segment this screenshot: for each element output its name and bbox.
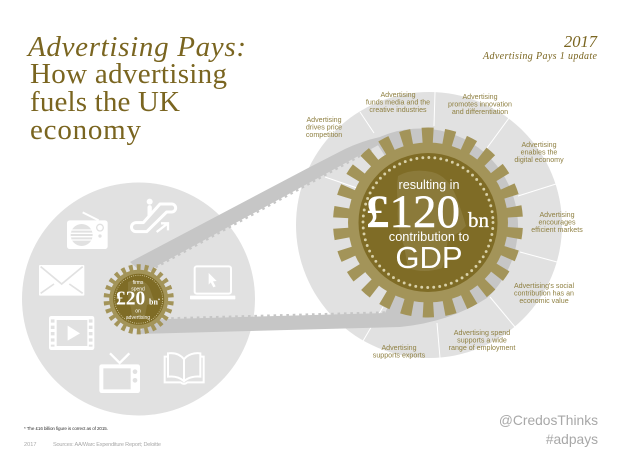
icon: video: [49, 316, 94, 350]
panel: advertising media circle: [22, 182, 255, 416]
label: social contribution: Advertising's social: [514, 282, 574, 290]
text: firms spend £20bn on advertising: *: [158, 298, 161, 302]
icon: open book: [165, 353, 204, 384]
text: firms spend £20bn on advertising: firms: [133, 280, 144, 286]
label: employment: Advertising spend: [454, 329, 510, 337]
belt connecting the gears: [130, 128, 518, 334]
label: exports: supports exports: [373, 352, 426, 360]
text: firms spend £20bn on advertising: on: [135, 308, 141, 314]
label: efficient markets: Advertising: [539, 211, 575, 219]
sources line: Sources: AA/Warc Expenditure Report; Deloitte: [53, 442, 161, 448]
label: innovation: Advertising: [462, 93, 498, 101]
label: price competition: drives price: [306, 124, 342, 132]
text: resulting in £120bn contribution to GDP: resulting in: [399, 178, 459, 192]
queen's head watermark: [397, 171, 466, 271]
text: resulting in £120bn contribution to GDP: bn: [468, 208, 490, 232]
title: fuels the UK: [30, 86, 180, 118]
label: digital economy: digital economy: [514, 156, 564, 164]
text: resulting in £120bn contribution to GDP: contribution to: [389, 229, 469, 244]
icon: television: [99, 353, 140, 393]
text: resulting in £120bn contribution to GDP: GDP: [395, 240, 463, 275]
report date and name: 2017: [564, 32, 598, 51]
label: employment: range of employment: [449, 344, 515, 352]
label: social contribution: contribution has an: [514, 290, 574, 298]
label: efficient markets: encourages: [538, 218, 576, 226]
text: firms spend £20bn on advertising: advertising: [126, 315, 150, 321]
icon: escalator: [131, 199, 176, 232]
title: How advertising: [30, 58, 227, 90]
social handles: #adpays: [546, 432, 598, 447]
title: [26, 31, 246, 146]
text: firms spend £20bn on advertising: [116, 280, 161, 321]
label: price competition: competition: [306, 131, 342, 139]
label: innovation: and differentiation: [452, 108, 508, 116]
label: digital economy: enables the: [521, 148, 557, 156]
label: social contribution: economic value: [519, 297, 569, 305]
label: media and creative industries: funds media and the: [366, 98, 430, 106]
label: media and creative industries: creative industries: [369, 106, 427, 114]
label: digital economy: Advertising: [521, 141, 557, 149]
title: economy: [30, 114, 142, 146]
report date and name: Advertising Pays 1 update: [482, 51, 598, 62]
social handles: @CredosThinks: [499, 413, 598, 428]
title: Advertising Pays:: [26, 31, 246, 63]
label: exports: Advertising: [381, 344, 417, 352]
small gear: [107, 267, 171, 331]
text: firms spend £20bn on advertising: bn: [149, 298, 158, 306]
label: efficient markets: efficient markets: [531, 226, 583, 234]
text: firms spend £20bn on advertising: £20: [116, 288, 145, 310]
label: price competition: Advertising: [306, 116, 342, 124]
footnote: * The £16 billion figure is correct as of 2015.: [24, 426, 108, 431]
report date and name: [482, 32, 598, 62]
icon: envelope: [39, 265, 84, 296]
text: firms spend £20bn on advertising: spend: [131, 286, 145, 292]
big gear: [342, 136, 514, 309]
text: resulting in £120bn contribution to GDP: £120: [366, 186, 460, 238]
label: media and creative industries: Advertising: [380, 91, 416, 99]
icon: laptop: [190, 266, 235, 299]
sources line: 2017: [24, 442, 36, 448]
label: innovation: promotes innovation: [448, 100, 512, 108]
social handles: [499, 413, 598, 447]
text: resulting in £120bn contribution to GDP: [366, 178, 490, 275]
panel: economic benefits wheel: [296, 91, 583, 360]
queen's head watermark small: [128, 280, 154, 317]
icon: radio: [67, 212, 108, 249]
label: employment: supports a wide: [457, 336, 507, 344]
